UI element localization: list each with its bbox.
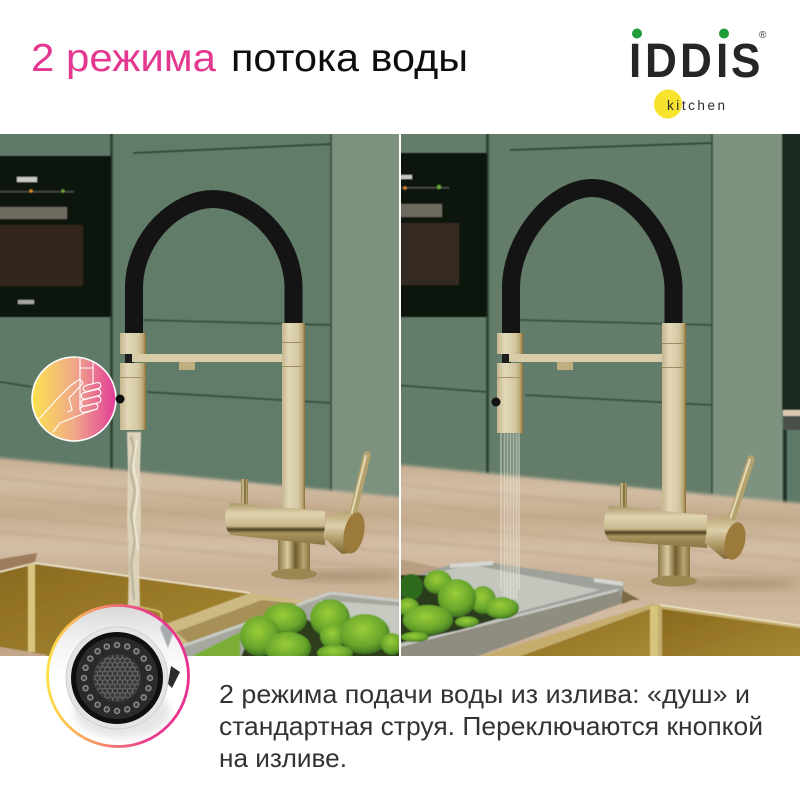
faucet shadow right: [675, 579, 795, 589]
water stream left: [127, 432, 141, 607]
title: [31, 37, 468, 80]
logo: IDDIS kitchen: ®: [759, 30, 767, 41]
oven right: [390, 153, 487, 317]
water stream right: [501, 433, 519, 600]
countertop right: [401, 462, 800, 656]
sink left: [0, 553, 305, 660]
oven left: [0, 156, 111, 317]
photo panel: faucet with standard stream: [0, 134, 399, 656]
colander and limes right: [395, 558, 640, 660]
description text: 2 режима подачи воды из излива: «душ» и: [219, 679, 750, 709]
description text: стандартная струя. Переключаются кнопкой: [219, 711, 763, 741]
countertop left: [0, 456, 399, 624]
mesh aerator: [93, 654, 141, 702]
logo: IDDIS kitchen: [629, 28, 767, 122]
sink right: [467, 604, 800, 660]
logo: IDDIS kitchen: IDDIS: [629, 33, 760, 87]
title: 2 режима: [31, 37, 216, 80]
description text: [219, 679, 763, 773]
faucet left: [120, 199, 368, 580]
title: потока воды: [231, 37, 468, 80]
photo panel: faucet with shower stream: [401, 134, 800, 656]
logo: IDDIS kitchen: kitchen: [667, 98, 725, 113]
colander and limes left: [182, 591, 399, 656]
faucet right: [492, 188, 751, 586]
faucet shadow left: [290, 571, 400, 581]
icon: hand pressing button: [32, 350, 124, 441]
description text: на изливе.: [219, 743, 347, 773]
icon: aerator close-up: [47, 605, 189, 749]
spray nozzles: [82, 642, 152, 714]
